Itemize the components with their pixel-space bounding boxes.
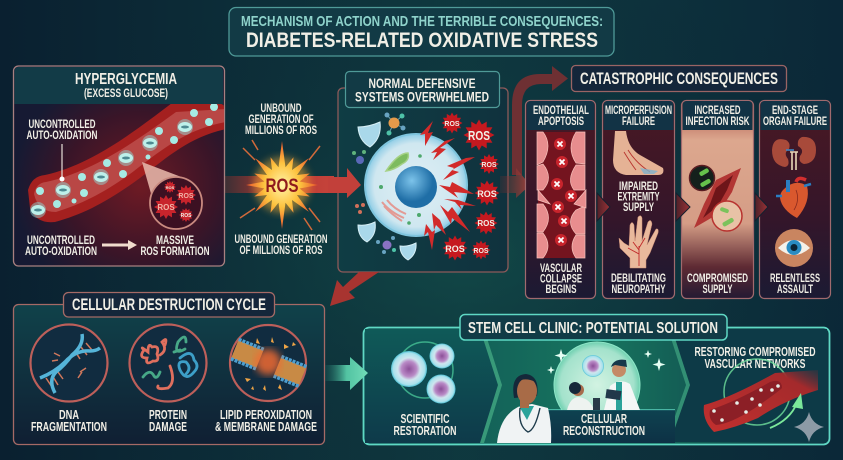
- panel: endothelial apoptosis: [526, 100, 596, 298]
- heading: stem cell clinic: STEM CELL CLINIC: POTENTIAL SOLUTION: [468, 320, 718, 337]
- heading: catastrophic consequences: [572, 66, 786, 92]
- icons: ROS particles: ROS: [444, 121, 460, 128]
- label: lipid peroxidation: & MEMBRANE DAMAGE: [215, 420, 317, 434]
- label: normal defensive systems overwhelmed: SYSTEMS OVERWHELMED: [355, 90, 489, 104]
- footer text: VASCULAR: [540, 263, 582, 275]
- label: uncontrolled auto-oxidation bottom: AUTO-OXIDATION: [25, 246, 97, 258]
- arrow: down to destruction cycle: [330, 272, 379, 306]
- icon: heart: [776, 178, 811, 218]
- chevrons between consequence panels: [597, 193, 768, 221]
- title line one: MECHANISM OF ACTION AND THE TERRIBLE CONSEQUENCES:: [241, 13, 603, 30]
- title box: [229, 8, 614, 56]
- text: unbound generation top: MILLIONS OF ROS: [245, 125, 317, 137]
- illustration: blood vessel with glucose: [28, 101, 226, 222]
- arrow: into the cell: [328, 168, 361, 198]
- panel: end-stage organ failure: [760, 100, 830, 298]
- label: protein damage: DAMAGE: [149, 420, 187, 434]
- label: massive ROS formation: MASSIVE: [156, 235, 194, 247]
- arrow: destruction to stem cell solution: [325, 357, 368, 390]
- icons: red lightning bolts: [420, 121, 476, 250]
- panel: microperfusion failure: [602, 100, 674, 298]
- footer text: [770, 273, 820, 296]
- header text: INFECTION RISK: [686, 116, 750, 128]
- arrow: to ROS formation: [102, 240, 137, 250]
- header: [760, 101, 830, 130]
- icons: ROS particles: ROS: [445, 244, 465, 254]
- illustration: lab dome with scientists: [547, 342, 666, 410]
- icon: ROS explosion: ROS: [266, 176, 298, 197]
- label: scientific restoration: [394, 412, 456, 438]
- label: massive ROS formation: [140, 235, 210, 258]
- curved arrow to catastrophic consequences: [512, 66, 568, 175]
- icon: protein damage: [130, 324, 206, 402]
- illustration: vessel wall with apoptotic cells: [537, 132, 586, 258]
- panel: normal defensive systems: [338, 88, 508, 272]
- icons: ROS particles: ROS: [468, 128, 490, 143]
- label: DNA fragmentation: FRAGMENTATION: [31, 420, 107, 434]
- footer text: COLLAPSE: [540, 274, 582, 286]
- text: impaired extremity supply: EXTREMITY: [618, 192, 660, 204]
- magnified ROS inset: [142, 162, 202, 229]
- footer text: DEBILITATING: [611, 273, 666, 285]
- footer text: [687, 273, 748, 296]
- header text: APOPTOSIS: [538, 116, 584, 128]
- label: uncontrolled auto-oxidation top: AUTO-OXIDATION: [26, 130, 98, 142]
- text: unbound generation bottom: OF MILLIONS OF ROS: [240, 245, 323, 257]
- text: unbound generation bottom: UNBOUND GENERATION: [234, 234, 328, 246]
- header: [526, 101, 594, 130]
- label: normal defensive systems overwhelmed: NORMAL DEFENSIVE: [368, 76, 476, 91]
- icons: ROS particles: ROS: [481, 162, 497, 169]
- header text: MICROPERFUSION: [605, 105, 672, 117]
- footer text: SUPPLY: [702, 284, 733, 296]
- icon: lipid peroxidation: [230, 325, 306, 401]
- header text: [533, 105, 589, 128]
- label: cellular reconstruction: [563, 412, 645, 438]
- header text: INCREASED: [694, 105, 740, 117]
- header text: ENDOTHELIAL: [533, 105, 589, 117]
- icons: ROS particles: ROS: [477, 219, 495, 228]
- footer text: BEGINS: [546, 284, 577, 296]
- label: massive ROS formation: ROS FORMATION: [140, 246, 210, 258]
- figure: foreground doctor: [497, 374, 551, 443]
- title line two: DIABETES-RELATED OXIDATIVE STRESS: [246, 28, 598, 52]
- panel: hyperglycemia: [14, 66, 226, 266]
- footer text: COMPROMISED: [687, 273, 748, 285]
- label: uncontrolled auto-oxidation bottom: UNCONTROLLED: [27, 235, 95, 247]
- panel: cellular destruction cycle: [14, 292, 324, 444]
- callout line: [60, 144, 64, 182]
- icons: antioxidant molecules: [352, 112, 406, 254]
- text: unbound generation bottom: [234, 234, 328, 257]
- header text: FAILURE: [622, 116, 655, 128]
- label: restoring compromised vascular networks: [694, 345, 816, 371]
- illustration: restored vessel: [704, 359, 818, 432]
- footer text: [540, 263, 582, 296]
- cell illustration: [365, 134, 467, 236]
- label: uncontrolled auto-oxidation top: UNCONTROLLED: [28, 119, 96, 131]
- label: DNA fragmentation: [31, 408, 107, 434]
- magnified ROS inset: ROS: [181, 213, 192, 219]
- text: impaired extremity supply: [618, 181, 660, 214]
- section dividers and lower band: [365, 329, 827, 443]
- subheading: (EXCESS GLUCOSE): [84, 88, 168, 100]
- arrow band from hyperglycemia to ROS burst and cell: [214, 166, 334, 204]
- icons: ROS particles: ROS: [473, 248, 489, 255]
- text: unbound generation top: UNBOUND: [260, 103, 302, 115]
- heading: stem cell clinic: [460, 314, 727, 340]
- icon: foot: [613, 131, 663, 175]
- icons: shields: [358, 122, 416, 260]
- header: [682, 101, 752, 130]
- icon: ROS explosion: [240, 140, 320, 230]
- panel header: [14, 67, 223, 104]
- icons: ROS particles: ROS: [477, 189, 497, 199]
- label: scientific restoration: SCIENTIFIC: [400, 412, 450, 426]
- icon: kidneys: [772, 137, 816, 170]
- label: uncontrolled auto-oxidation top: [26, 119, 98, 142]
- text: impaired extremity supply: SUPPLY: [623, 202, 654, 214]
- heading: [64, 292, 274, 317]
- text: impaired extremity supply: IMPAIRED: [619, 181, 658, 193]
- footer text: NEUROPATHY: [612, 284, 666, 296]
- icon: eye: [775, 229, 813, 267]
- label: scientific restoration: RESTORATION: [394, 424, 456, 438]
- text: unbound generation top: GENERATION OF: [248, 114, 314, 126]
- label: protein damage: [149, 408, 187, 434]
- panel: stem cell clinic: [364, 328, 830, 444]
- magnified ROS inset: ROS: [157, 203, 175, 212]
- arrow: out to consequences: [500, 168, 530, 198]
- icon: DNA fragmentation: [30, 324, 108, 402]
- icons: ROS particles: [442, 112, 500, 260]
- label: cellular reconstruction: CELLULAR: [581, 412, 627, 426]
- header text: [763, 105, 827, 128]
- label: DNA fragmentation: DNA: [59, 408, 79, 422]
- text: unbound generation top: [245, 103, 317, 137]
- label: cellular reconstruction: RECONSTRUCTION: [563, 424, 645, 438]
- icon: sparkle watermark: [794, 412, 824, 442]
- header text: [605, 105, 672, 128]
- icon: stem cells: [391, 342, 456, 404]
- label: uncontrolled auto-oxidation bottom: [25, 235, 97, 258]
- heading: CELLULAR DESTRUCTION CYCLE: [72, 296, 266, 314]
- magnified ROS inset: ROS: [178, 193, 194, 200]
- header text: [686, 105, 750, 128]
- icon: hand: [619, 216, 658, 268]
- footer text: [611, 273, 666, 296]
- footer text: ASSAULT: [777, 284, 813, 296]
- header: [604, 101, 674, 130]
- panel: increased infection risk: [682, 100, 754, 298]
- header text: END-STAGE: [772, 105, 818, 117]
- label: lipid peroxidation: LIPID PEROXIDATION: [220, 408, 312, 422]
- label: normal defensive systems overwhelmed: [346, 72, 500, 108]
- magnified ROS inset: ROS: [166, 185, 175, 190]
- label: protein damage: PROTEIN: [149, 408, 187, 422]
- heading: hyperglycemia: HYPERGLYCEMIA: [75, 71, 177, 88]
- label: lipid peroxidation: [215, 408, 317, 434]
- illustration: infected wound: [690, 166, 742, 231]
